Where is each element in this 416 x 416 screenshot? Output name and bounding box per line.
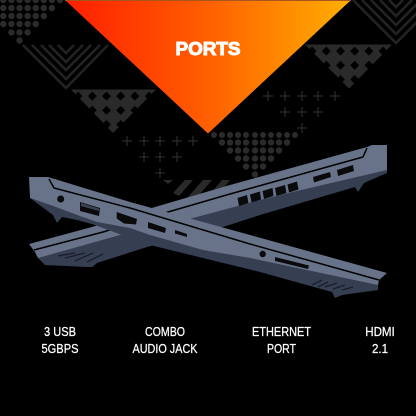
- laptop: front, falling to the right: [29, 177, 387, 298]
- laptop front: side face: [29, 177, 387, 285]
- label: HDMI 2.1: [365, 324, 395, 356]
- label: 3 USB 5GBPS: [42, 324, 79, 356]
- laptop back: USB ports: [313, 165, 354, 182]
- laptop front: power port: [57, 196, 64, 202]
- heading: PORTS: PORTS: [176, 39, 240, 59]
- background pattern: dots centre: [211, 132, 298, 178]
- laptop front: ethernet port: [80, 202, 100, 216]
- background pattern: diagonal stripes centre: [163, 180, 230, 203]
- label: COMBO AUDIO JACK: [132, 324, 198, 356]
- laptop front: underside: [30, 198, 378, 298]
- laptop back: seam line: [34, 148, 367, 250]
- label: COMBO AUDIO JACK: COMBO: [145, 324, 185, 339]
- label: COMBO AUDIO JACK: AUDIO JACK: [132, 341, 198, 356]
- background pattern: plus signs left: [122, 136, 198, 178]
- laptop back: underside: [36, 168, 387, 267]
- background pattern: dots top left: [0, 0, 63, 44]
- laptop front: HDMI port: [117, 212, 137, 224]
- background pattern: plus signs right: [263, 91, 340, 133]
- laptop front: seam line: [49, 179, 379, 280]
- laptop front: vents: [312, 280, 353, 290]
- background pattern: lattice triangle left: [71, 90, 156, 133]
- label: HDMI 2.1: HDMI: [365, 324, 395, 339]
- label: ETHERNET PORT: [252, 324, 311, 356]
- banner top edge: [65, 0, 351, 1]
- label: HDMI 2.1: 2.1: [372, 341, 388, 356]
- label: 3 USB 5GBPS: 3 USB: [44, 324, 76, 339]
- laptop back: side face: [29, 145, 387, 258]
- label: ETHERNET PORT: PORT: [267, 341, 296, 356]
- laptop front: audio jack: [260, 251, 266, 257]
- label: ETHERNET PORT: ETHERNET: [252, 324, 311, 339]
- background pattern: chevron top right: [353, 0, 416, 43]
- orange banner triangle: [65, 0, 351, 134]
- background pattern: lattice triangle right: [305, 44, 392, 88]
- laptop front: USB port: [148, 222, 166, 233]
- background pattern: chevron top left: [23, 45, 108, 88]
- label: 3 USB 5GBPS: 5GBPS: [42, 341, 79, 356]
- laptop back: vents: [58, 253, 103, 262]
- laptop front: USB-C port: [175, 230, 187, 237]
- laptop: back, rising to the right: [29, 145, 387, 267]
- laptop back: five square ports: [238, 182, 298, 206]
- laptop front: SD card slot: [275, 257, 309, 269]
